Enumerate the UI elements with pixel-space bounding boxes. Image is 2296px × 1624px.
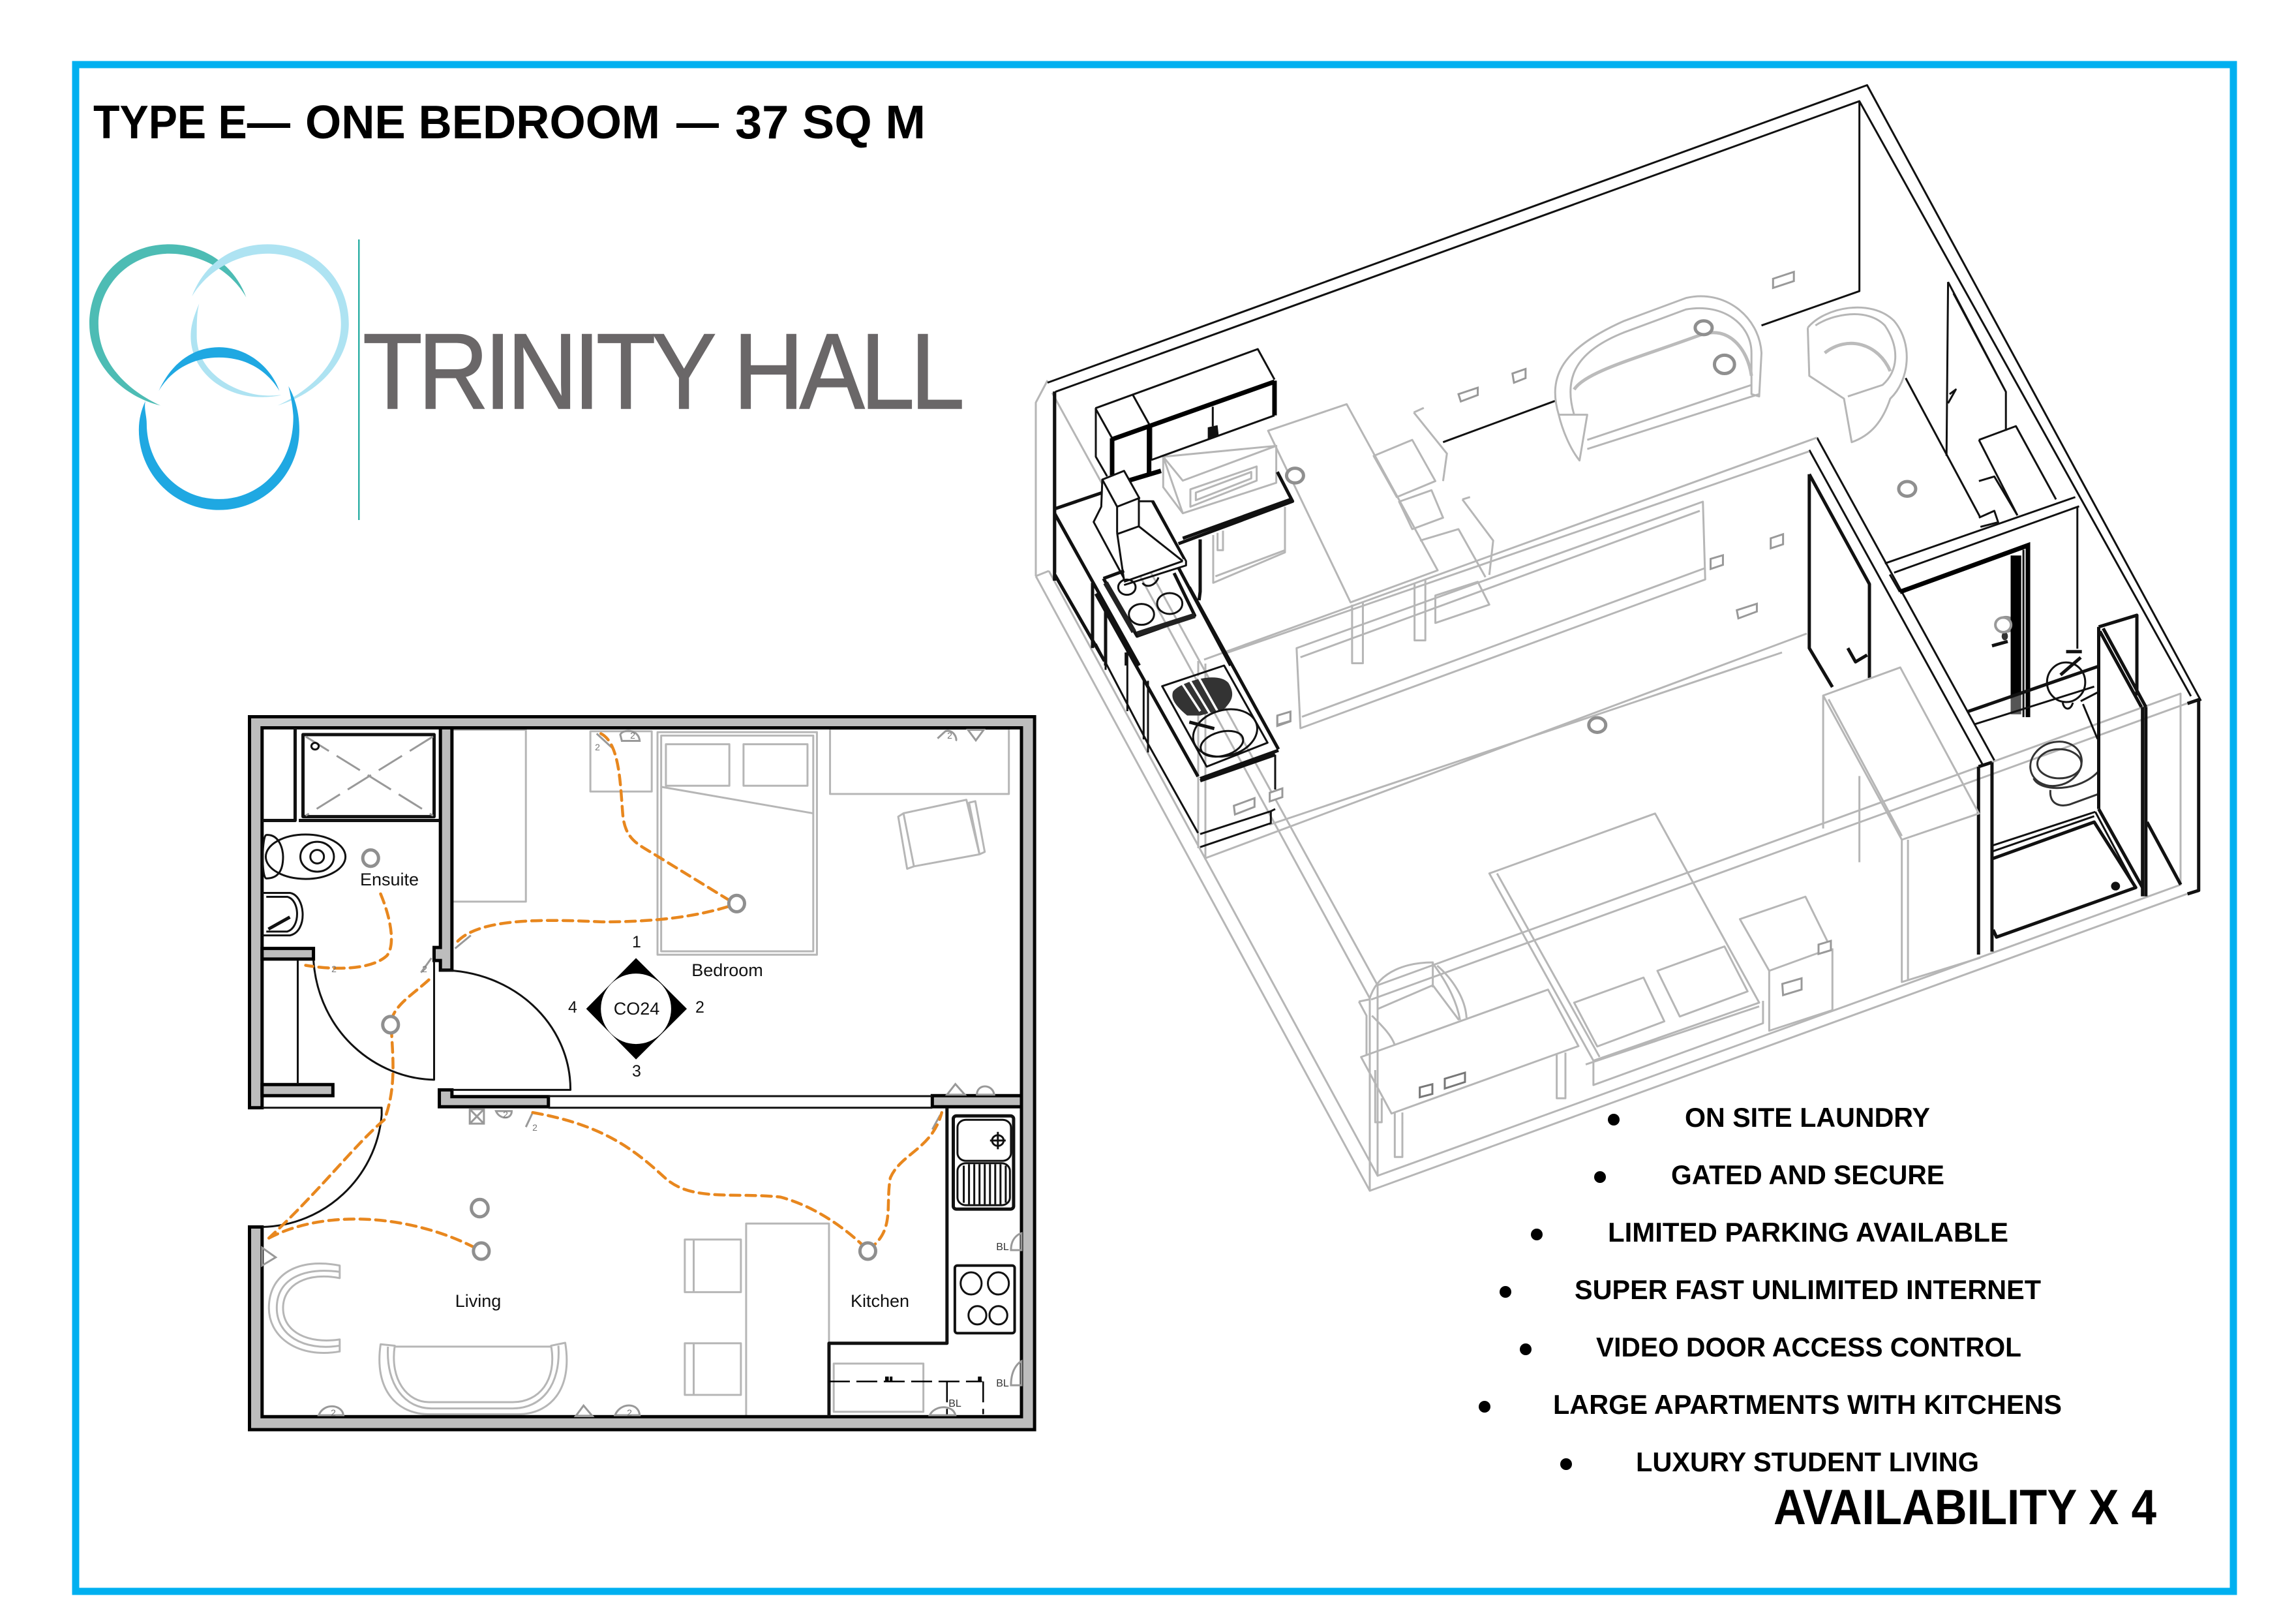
small BL markers: BL xyxy=(948,1398,961,1409)
toilet xyxy=(2028,737,2099,805)
title: 37 SQ M xyxy=(735,97,926,149)
small switch numbers: 2 xyxy=(630,730,635,741)
kitchen: sink and base unit xyxy=(1096,587,1290,847)
wall cabinets xyxy=(1095,349,1275,481)
outer and inner walls xyxy=(1048,85,2201,701)
room label: Living: Living xyxy=(455,1291,501,1311)
room shell gray lines xyxy=(1036,380,2187,1191)
title xyxy=(93,97,926,149)
cooker hood xyxy=(1094,471,1183,581)
small BL markers xyxy=(948,1242,1009,1409)
small switch numbers: 2 xyxy=(532,1122,537,1133)
logo wordmark: TRINITY HALL xyxy=(363,311,965,432)
small switch numbers: 2 xyxy=(331,964,337,974)
bathroom door xyxy=(1900,545,2099,724)
microwave and oven xyxy=(1163,446,1285,583)
room label: Ensuite: Ensuite xyxy=(360,870,419,889)
room label: Kitchen: Kitchen xyxy=(851,1291,909,1311)
nightstand xyxy=(1740,896,1832,1031)
isometric 3D view xyxy=(1036,85,2201,1191)
icon: three interlocking rings xyxy=(89,244,349,510)
feature list xyxy=(1479,1102,2062,1477)
isometric lower part: bedroom furniture xyxy=(1489,667,1980,1085)
logo: Trinity Hall xyxy=(89,239,965,520)
compass numbers: 3 xyxy=(632,1062,641,1080)
small switch numbers xyxy=(331,730,952,1418)
wardrobe xyxy=(1823,667,1980,982)
furniture: bedroom and living xyxy=(269,729,1009,1417)
sofa xyxy=(1555,296,1762,461)
wall sockets xyxy=(1277,272,1794,726)
bed xyxy=(1489,814,1763,1085)
small switch numbers: 2 xyxy=(422,964,427,974)
floor plan xyxy=(250,716,1035,1430)
basin xyxy=(2047,652,2098,739)
kitchen: wall cabinets, hood and hob xyxy=(1055,349,1293,666)
wall ends xyxy=(1978,762,1992,955)
compass numbers: 4 xyxy=(568,998,577,1017)
small BL markers: BL xyxy=(996,1242,1009,1253)
unit label: CO24: CO24 xyxy=(614,999,659,1019)
walls xyxy=(250,716,1035,1430)
title: TYPE E— xyxy=(93,97,290,149)
small switch numbers: 2 xyxy=(503,1109,508,1120)
bullet: internet: SUPER FAST UNLIMITED INTERNET xyxy=(1575,1274,2041,1305)
shower stall xyxy=(1993,615,2181,937)
bathroom xyxy=(1890,506,2199,955)
transparent partition wall and window xyxy=(1204,438,1817,728)
bullet: limited parking: LIMITED PARKING AVAILABLE xyxy=(1608,1217,2008,1248)
ensuite partition and doors xyxy=(1809,282,2079,765)
small switch numbers: 2 xyxy=(595,742,600,752)
CO24 unit symbol xyxy=(586,958,687,1060)
bullet: door access: VIDEO DOOR ACCESS CONTROL xyxy=(1596,1332,2021,1362)
ensuite fixtures xyxy=(262,728,440,936)
bullet: apartments: LARGE APARTMENTS WITH KITCHENS xyxy=(1553,1389,2062,1420)
logo divider line xyxy=(358,239,360,520)
counter edge xyxy=(1055,391,1140,666)
kitchen counter and appliances xyxy=(829,1108,1015,1417)
room label: Bedroom: Bedroom xyxy=(691,960,763,980)
hob xyxy=(1104,540,1231,666)
title: ONE BEDROOM xyxy=(305,97,660,149)
compass numbers: 2 xyxy=(695,998,704,1017)
compass numbers: 1 xyxy=(632,933,641,951)
ceiling light fittings xyxy=(363,850,875,1259)
bullet: luxury: LUXURY STUDENT LIVING xyxy=(1636,1447,1979,1477)
small BL markers: BL xyxy=(996,1378,1009,1389)
sockets by base unit xyxy=(1234,712,1290,814)
small switch numbers: 2 xyxy=(331,1407,336,1418)
oven shelf xyxy=(1179,472,1293,544)
title: — xyxy=(676,97,719,149)
electrical symbols xyxy=(262,729,1021,1416)
sink drainer xyxy=(1172,677,1232,716)
bullet: gated and secure: GATED AND SECURE xyxy=(1671,1159,1944,1190)
wardrobe side lines xyxy=(1890,506,2077,649)
small switch numbers: 2 xyxy=(947,730,952,741)
compass numbers xyxy=(568,933,704,1080)
bullet: on site laundry: ON SITE LAUNDRY xyxy=(1685,1102,1930,1133)
sink bowl and tap xyxy=(1188,703,1263,763)
lighting circuit dashed lines xyxy=(269,733,942,1251)
armchair xyxy=(1807,307,1907,442)
sockets lower xyxy=(1782,941,1831,995)
island and stools xyxy=(1268,404,1493,664)
small switch numbers: 2 xyxy=(627,1407,632,1418)
isometric upper part: walls and living area xyxy=(1048,85,2201,765)
right corner black xyxy=(2188,699,2199,894)
desk and chair xyxy=(1359,962,1578,1157)
ceiling lights xyxy=(1286,321,2014,732)
availability callout: AVAILABILITY X 4 xyxy=(1774,1480,2156,1535)
